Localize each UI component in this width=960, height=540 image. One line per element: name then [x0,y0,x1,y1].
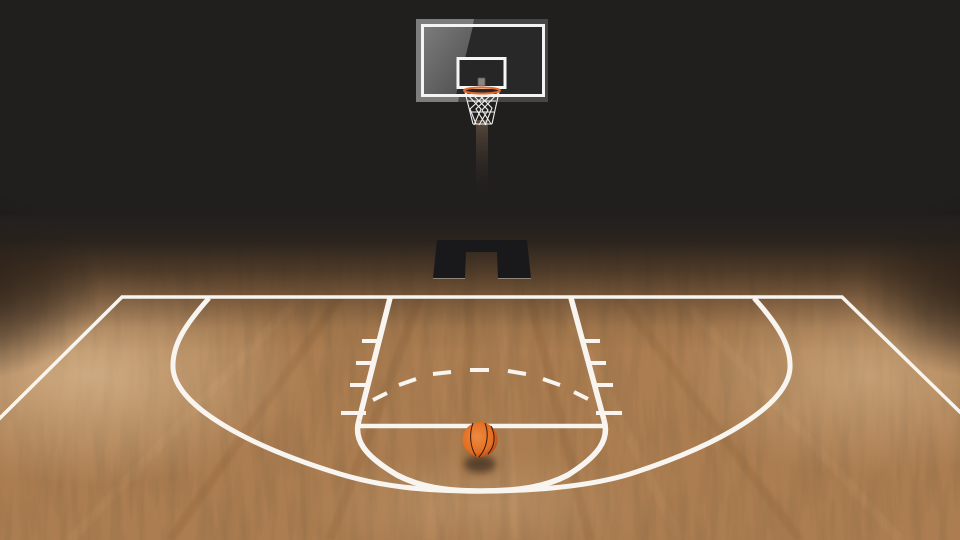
lane tick marks [341,341,622,413]
wood plank streaks [70,297,900,540]
court lines [0,297,960,491]
lane lines [359,298,604,420]
wooden floor [0,190,960,540]
free throw line [360,424,604,428]
hoop base [433,240,531,278]
floor lighting [0,265,310,485]
backboard outer frame [422,26,544,96]
dashed free throw arc [373,370,588,400]
net [465,92,499,125]
ball shadow [464,455,496,473]
shooter square [458,58,505,88]
hoop pole [476,120,488,195]
dark floor corners [0,190,100,380]
backboard [416,19,548,102]
lower key circle [358,420,606,491]
baseline and sidelines [0,297,960,420]
wood grain texture [0,215,960,540]
rim [464,88,500,94]
three point arc [173,298,790,491]
basketball [462,422,498,457]
